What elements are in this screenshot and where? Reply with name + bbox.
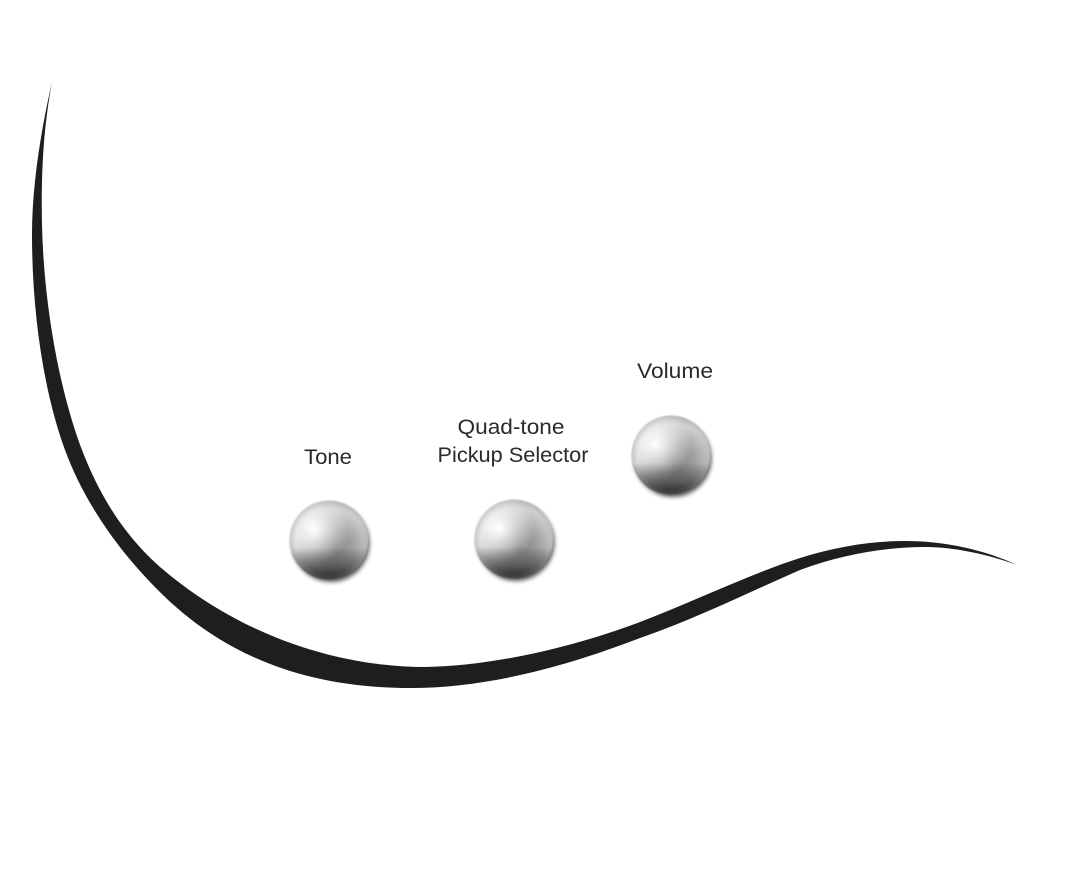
label: Quad-tone Pickup Selector: Quad-tone [458,416,564,439]
knob: Volume [632,416,712,497]
label: Quad-tone Pickup Selector [438,416,589,467]
label: Volume: Volume [637,360,713,383]
label: Tone: Tone [304,446,352,469]
knob: Quad-tone Pickup Selector [474,500,554,581]
guitar body outline curve [32,82,1017,688]
label: Quad-tone Pickup Selector: Pickup Selector [438,444,589,467]
knob: Tone [290,500,370,582]
